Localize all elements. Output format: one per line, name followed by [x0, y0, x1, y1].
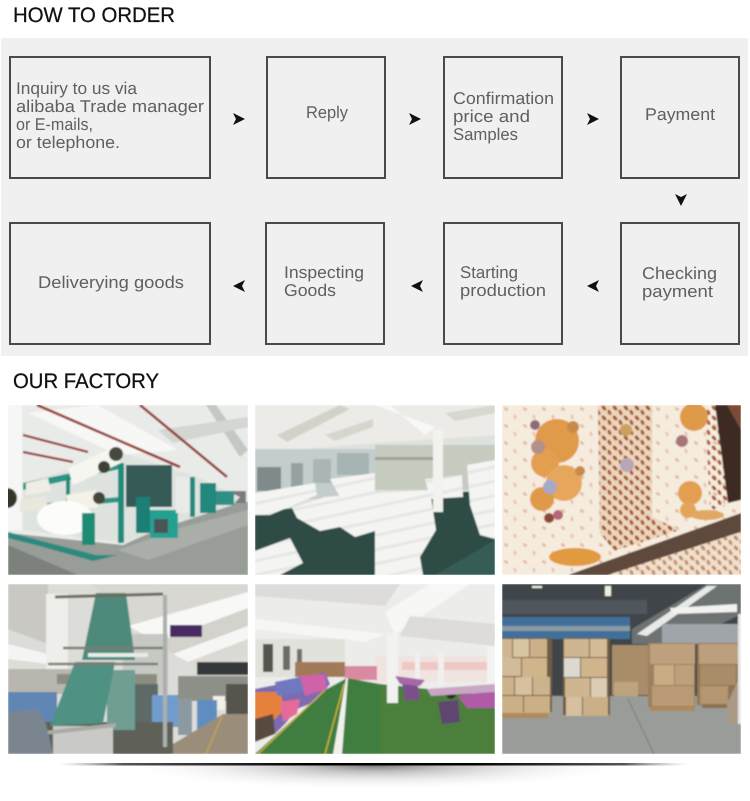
stack two	[563, 638, 610, 715]
stack four	[697, 643, 738, 705]
step: inspecting goods	[266, 223, 384, 344]
step: delivering goods: Deliverying goods	[38, 273, 184, 292]
step: reply	[267, 57, 385, 178]
machinery silhouette	[23, 453, 240, 543]
step: confirmation: price and	[453, 107, 530, 126]
photo: white fabric storage	[255, 405, 495, 575]
arrow: production to inspecting	[411, 280, 423, 292]
step: inquiry: or telephone.	[16, 133, 120, 152]
arrow: confirmation to payment	[587, 113, 599, 125]
workers and purple fabric	[402, 683, 420, 700]
arrow: payment to checking	[675, 194, 687, 206]
photo: knitting machines	[8, 405, 248, 575]
bin and fabric pile	[53, 726, 113, 754]
step: inquiry: or E-mails,	[16, 115, 93, 134]
fabric piles	[255, 672, 330, 739]
stack one	[502, 638, 552, 712]
fabric rolls	[68, 447, 121, 485]
step: inspecting goods: Goods	[284, 281, 336, 300]
step: checking payment: payment	[642, 282, 713, 301]
photo: boxed goods warehouse	[502, 584, 741, 754]
frame	[55, 594, 163, 597]
step: checking payment: Checking	[642, 264, 717, 283]
arrow: inquiry to reply	[233, 113, 245, 125]
photo: sewing workshop floor	[255, 584, 495, 754]
step: inquiry: Inquiry to us via	[16, 79, 138, 98]
green floor	[255, 678, 495, 754]
arrow: reply to confirmation	[409, 113, 421, 125]
photo: printed bear fabric	[502, 405, 741, 575]
fabric piles	[255, 483, 317, 515]
step: confirmation: Confirmation	[453, 89, 554, 108]
step: delivering goods	[10, 223, 210, 344]
arrow: checking to production	[587, 280, 599, 292]
floor lines	[258, 684, 344, 754]
arrow: inspecting to delivering	[233, 280, 245, 292]
photo: finishing machine with teal fabric	[8, 584, 248, 754]
columns	[387, 633, 398, 703]
stack three	[648, 643, 695, 707]
step: confirmation	[444, 57, 562, 178]
step: inspecting goods: Inspecting	[284, 263, 364, 282]
roller bar	[568, 513, 741, 575]
panel: order steps	[1, 38, 748, 356]
machine sign	[170, 625, 202, 637]
step: starting production: Starting	[460, 263, 518, 282]
bottom shadow	[65, 763, 682, 784]
teal fabric	[107, 670, 135, 730]
step: inquiry: alibaba Trade manager	[16, 97, 204, 116]
step: confirmation: Samples	[453, 125, 518, 144]
step: starting production: production	[460, 281, 546, 300]
step: reply: Reply	[306, 103, 348, 122]
step: payment	[621, 57, 739, 178]
step: inquiry	[10, 57, 210, 178]
title: our factory: OUR FACTORY	[13, 370, 159, 393]
far boxes	[612, 645, 648, 695]
floor	[173, 714, 248, 754]
title: how to order: HOW TO ORDER	[13, 4, 175, 27]
bears	[535, 419, 579, 463]
step: checking payment	[621, 223, 739, 344]
blue machines	[8, 692, 57, 722]
concrete floor	[502, 696, 741, 754]
step: starting production	[444, 223, 562, 344]
step: payment: Payment	[645, 105, 715, 124]
